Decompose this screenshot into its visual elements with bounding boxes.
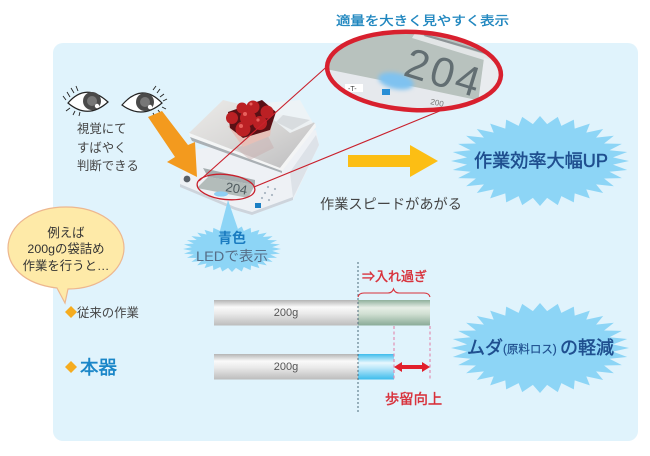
pointer: blue LED callout stem — [218, 200, 241, 238]
bar: conventional work amounts — [214, 300, 430, 326]
enlarged display inside red ellipse — [324, 30, 504, 112]
burst: blue LED display: LEDで表示 — [196, 248, 268, 264]
callout: small red ellipse on scale display — [196, 172, 256, 202]
callout: speech bubble example: 200gの袋詰め — [27, 241, 105, 256]
illustration: weighing scale with tomatoes: 204 — [224, 179, 248, 198]
callout: speech bubble example — [8, 207, 124, 303]
label: overfill: ⇒入れ過ぎ — [362, 269, 427, 284]
bar: conventional work amounts: 200g — [274, 307, 298, 319]
text: quick visual judgement: すばやく — [77, 141, 127, 155]
guide: dotted 200g target line — [357, 262, 359, 412]
label: this device: 本器 — [80, 357, 118, 378]
enlarged display inside red ellipse: 200 — [430, 97, 445, 109]
burst: greatly improved efficiency: 作業効率大幅UP — [474, 151, 608, 171]
enlarged display inside red ellipse: 204 — [399, 39, 489, 107]
illustration: weighing scale with tomatoes — [180, 100, 319, 215]
panel: light blue background — [53, 43, 638, 441]
burst: reduced waste: ムダ — [467, 338, 503, 358]
label: improved yield: 歩留向上 — [385, 391, 442, 408]
burst: reduced waste: の軽減 — [560, 338, 614, 358]
bar: this device amounts: 200g — [274, 361, 298, 373]
text: work speed increases: 作業スピードがあがる — [320, 197, 462, 213]
icon: left eye — [63, 86, 108, 116]
label: conventional work: 従来の作業 — [77, 305, 139, 320]
bar: this device amounts — [214, 354, 394, 380]
arrow: orange arrow from eyes to display — [148, 111, 197, 177]
text: quick visual judgement: 視覚にて — [77, 122, 127, 136]
burst: blue LED display: 青色 — [218, 230, 246, 246]
heading: large easy-to-read display: 適量を大きく見やすく表示 — [336, 14, 509, 28]
callout: speech bubble example: 例えば — [47, 226, 85, 240]
guides: pink dashed yield lines — [394, 326, 430, 380]
burst: reduced waste: (原料ロス) — [503, 342, 557, 356]
text: quick visual judgement: 判断できる — [77, 159, 139, 173]
callout: speech bubble example: 作業を行うと… — [23, 258, 109, 273]
burst: greatly improved efficiency — [451, 116, 629, 206]
brace: overfill range — [358, 289, 430, 297]
icon: right eye — [122, 86, 167, 117]
text: quick visual judgement — [77, 122, 139, 173]
burst: blue LED display — [183, 226, 281, 272]
arrow: red double arrow yield gap — [394, 362, 430, 372]
callout lines: leading to enlarged display — [199, 62, 447, 187]
burst: reduced waste — [451, 303, 629, 393]
enlarged display inside red ellipse: -T- — [348, 86, 357, 93]
arrow: yellow arrow to efficiency — [348, 145, 438, 177]
